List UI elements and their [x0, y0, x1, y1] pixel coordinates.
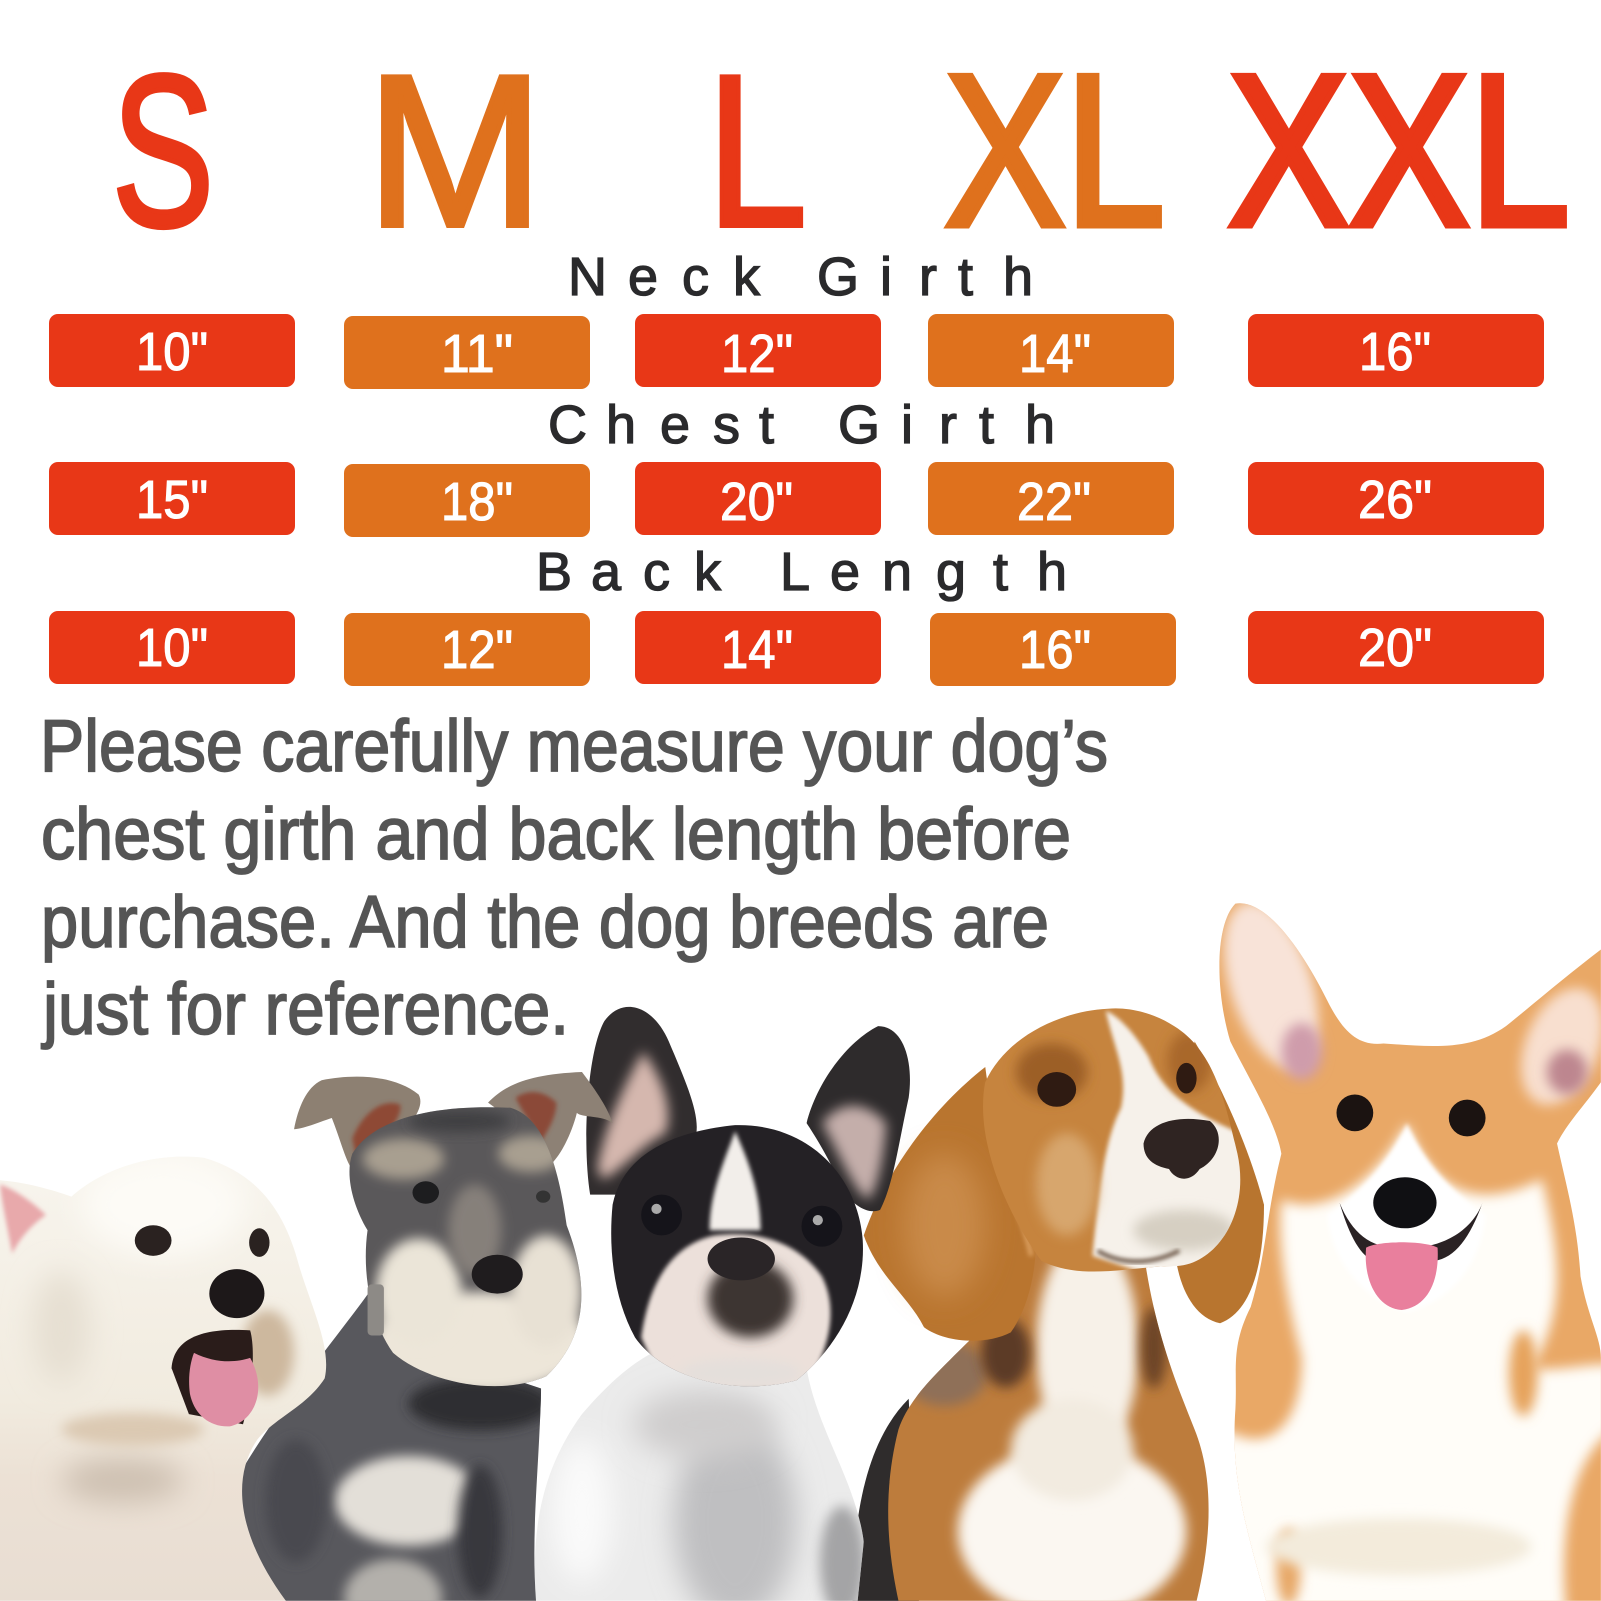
- schnauzer collar tag: [368, 1284, 384, 1335]
- corgi nose: [1373, 1177, 1437, 1228]
- note: measuring advice: [40, 706, 1108, 1050]
- value S 15 inch: 15": [136, 470, 208, 530]
- value L 14 inch: 14": [721, 620, 793, 680]
- schnauzer ears: [294, 1072, 613, 1174]
- value XXL 16 inch: 16": [1359, 322, 1431, 382]
- value XXL 26 inch: [1248, 462, 1544, 535]
- value XL 16 inch: [930, 613, 1176, 686]
- value L 14 inch: [635, 611, 881, 684]
- heading: chest girth: Chest Girth: [548, 395, 1055, 455]
- value S 10 inch: 10": [136, 322, 208, 382]
- westie ear: [0, 1184, 46, 1254]
- value XL 22 inch: 22": [1017, 472, 1091, 532]
- schnauzer eyes: [412, 1181, 550, 1204]
- value M 18 inch: [344, 464, 590, 537]
- corgi mouth and tongue: [1340, 1203, 1482, 1310]
- heading: size letters: [112, 29, 1570, 272]
- size M: M: [366, 30, 544, 272]
- corgi eyes: [1336, 1095, 1486, 1136]
- value L 12 inch: [635, 314, 881, 387]
- value XXL 26 inch: 26": [1358, 470, 1432, 530]
- note: measuring advice: purchase. And the dog breeds are: [41, 882, 1049, 963]
- dog: schnauzer: [214, 1072, 613, 1601]
- size L: L: [707, 30, 807, 272]
- value XL 14 inch: 14": [1019, 324, 1091, 384]
- value M 18 inch: 18": [441, 472, 513, 532]
- value XXL 20 inch: 20": [1358, 618, 1432, 678]
- value S 10 inch: [49, 611, 295, 684]
- note: measuring advice: chest girth and back length before: [41, 794, 1071, 875]
- value M 11 inch: 11": [441, 324, 513, 384]
- value XXL 16 inch: [1248, 314, 1544, 387]
- dog: beagle: [853, 1001, 1264, 1601]
- value M 12 inch: 12": [441, 620, 513, 680]
- french bulldog ears: [586, 1007, 910, 1211]
- schnauzer nose: [472, 1255, 523, 1294]
- beagle eyes: [1037, 1063, 1197, 1107]
- westie eyes: [135, 1225, 270, 1257]
- section: neck girth: [49, 247, 1544, 389]
- note: measuring advice: just for reference.: [41, 969, 569, 1050]
- size XL: XL: [945, 29, 1165, 271]
- value S 10 inch: [49, 314, 295, 387]
- section: chest girth: [49, 395, 1544, 537]
- heading: back length: Back Length: [536, 542, 1067, 602]
- section: back length: [49, 542, 1544, 686]
- value XL 14 inch: [928, 314, 1174, 387]
- heading: neck girth: Neck Girth: [568, 247, 1033, 307]
- value XXL 20 inch: [1248, 611, 1544, 684]
- westie mouth and tongue: [172, 1330, 258, 1426]
- value L 20 inch: 20": [720, 472, 793, 532]
- value S 15 inch: [49, 462, 295, 535]
- value XL 16 inch: 16": [1019, 620, 1091, 680]
- dog: corgi: [1205, 888, 1601, 1601]
- beagle nose: [1144, 1119, 1219, 1179]
- value XL 22 inch: [928, 462, 1174, 535]
- french bulldog nose: [708, 1237, 775, 1280]
- dog: french bulldog: [521, 1007, 910, 1601]
- size S: S: [112, 30, 214, 272]
- dogs illustration: [0, 888, 1601, 1601]
- value M 11 inch: [344, 316, 590, 389]
- value S 10 inch: 10": [136, 618, 208, 678]
- value L 12 inch: 12": [721, 324, 793, 384]
- value M 12 inch: [344, 613, 590, 686]
- value L 20 inch: [635, 462, 881, 535]
- dog: westie: [0, 1154, 337, 1601]
- westie nose: [209, 1269, 264, 1318]
- french bulldog eyes: [641, 1195, 842, 1247]
- note: measuring advice: Please carefully measure your dog’s: [40, 706, 1108, 787]
